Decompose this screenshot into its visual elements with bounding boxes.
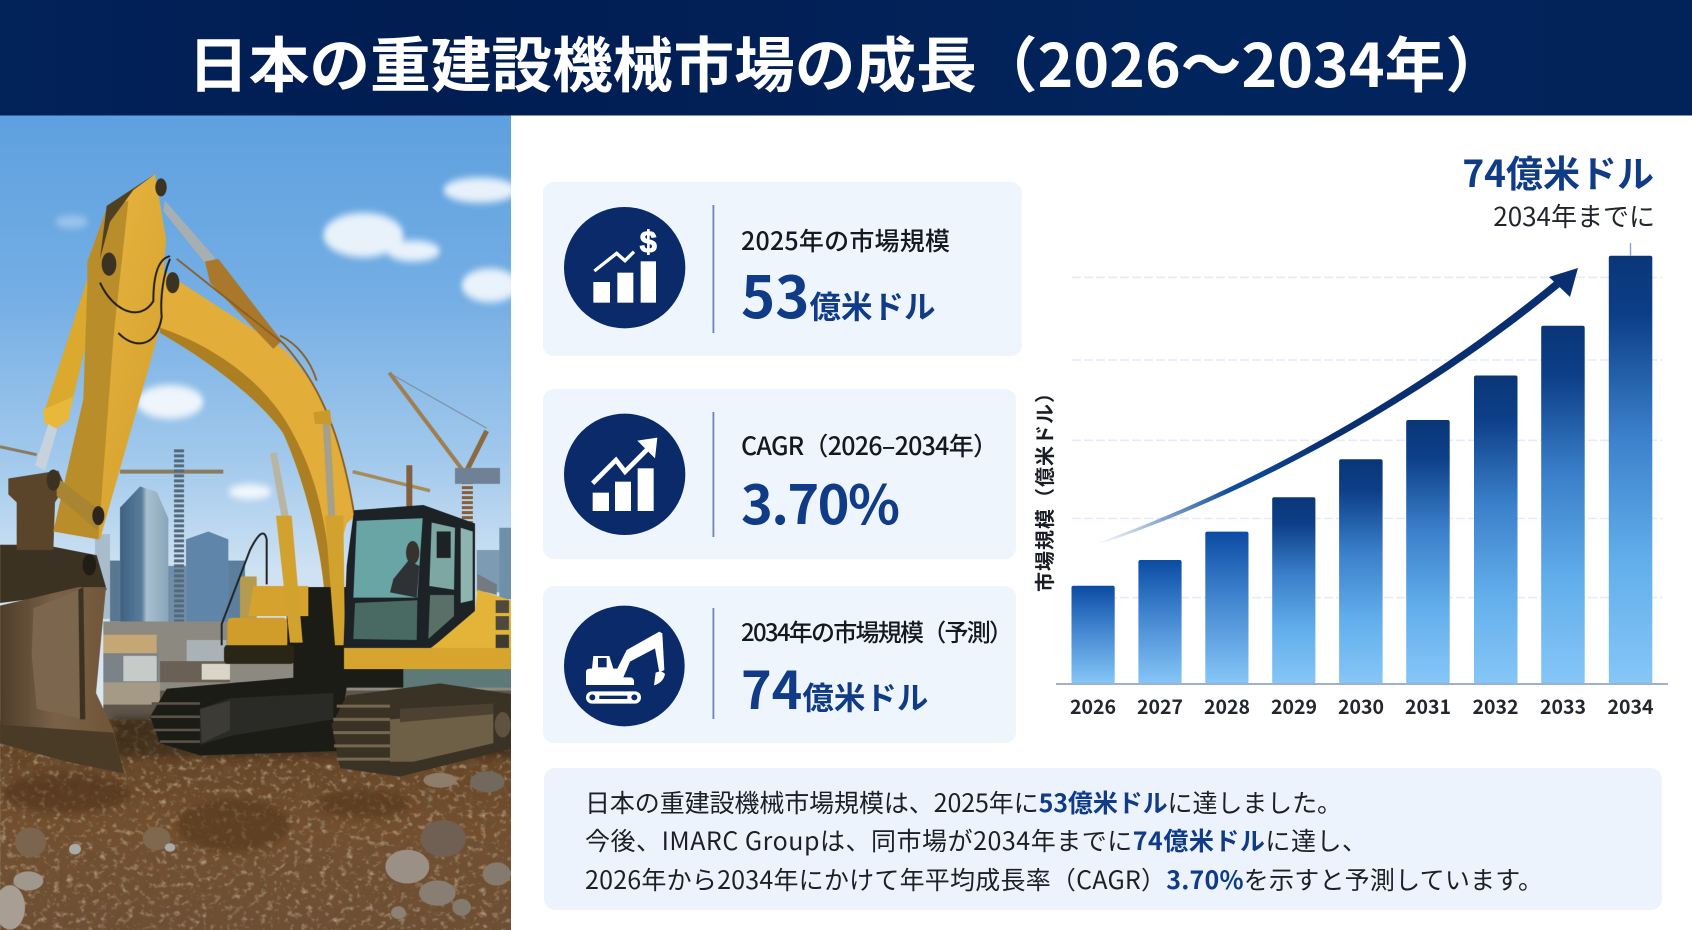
panel: 2034 market size forecast — [543, 586, 1016, 743]
growth arrow — [1097, 268, 1578, 545]
value: 3.70% — [741, 461, 900, 540]
bar chart: market size 2026-2034 — [1029, 144, 1668, 720]
value: 74億米ドル — [741, 649, 928, 724]
icon: chart with up arrow — [564, 414, 685, 535]
year labels: 2026 — [1070, 691, 1116, 720]
label: 2025年の市場規模 — [741, 222, 950, 258]
year labels: 2029 — [1271, 691, 1317, 720]
header band — [0, 0, 1692, 116]
callout: 2034 value — [1462, 144, 1655, 234]
summary line 3: 2026年から2034年にかけて年平均成長率（CAGR）3.70%を示すと予測しています。 — [585, 861, 1543, 897]
year labels: 2031 — [1405, 691, 1451, 720]
title: 日本の重建設機械市場の成長（2026～2034年） — [188, 18, 1506, 105]
year labels: 2034 — [1607, 691, 1654, 720]
axis title: 市場規模（億米ドル） — [1029, 383, 1058, 592]
year labels: 2033 — [1540, 691, 1586, 720]
panel: CAGR — [543, 389, 1016, 559]
icon: rising chart with dollar sign: $ — [640, 225, 657, 259]
icon: excavator — [564, 606, 685, 726]
label: 2034年の市場規模（予測） — [741, 613, 1013, 648]
photo: yellow excavator at a construction site with city skyline — [0, 100, 518, 930]
callout: 2034 value: 2034年までに — [1493, 197, 1655, 234]
label: CAGR（2026–2034年） — [741, 427, 998, 463]
value: 53億米ドル — [741, 251, 935, 335]
year labels: 2028 — [1204, 691, 1250, 720]
year labels: 2032 — [1472, 691, 1519, 720]
panel: 2025 market size — [543, 182, 1022, 356]
year labels: 2030 — [1338, 691, 1384, 720]
year labels — [1070, 691, 1654, 720]
summary line 2: 今後、IMARC Groupは、同市場が2034年までに74億米ドルに達し、 — [585, 822, 1367, 858]
icon: rising chart with dollar sign — [564, 207, 685, 328]
year labels: 2027 — [1137, 691, 1183, 720]
panel: summary text — [544, 768, 1662, 910]
summary line 1: 日本の重建設機械市場規模は、2025年に53億米ドルに達しました。 — [585, 784, 1342, 820]
callout: 2034 value: 74億米ドル — [1462, 144, 1654, 198]
bars — [1072, 256, 1652, 684]
